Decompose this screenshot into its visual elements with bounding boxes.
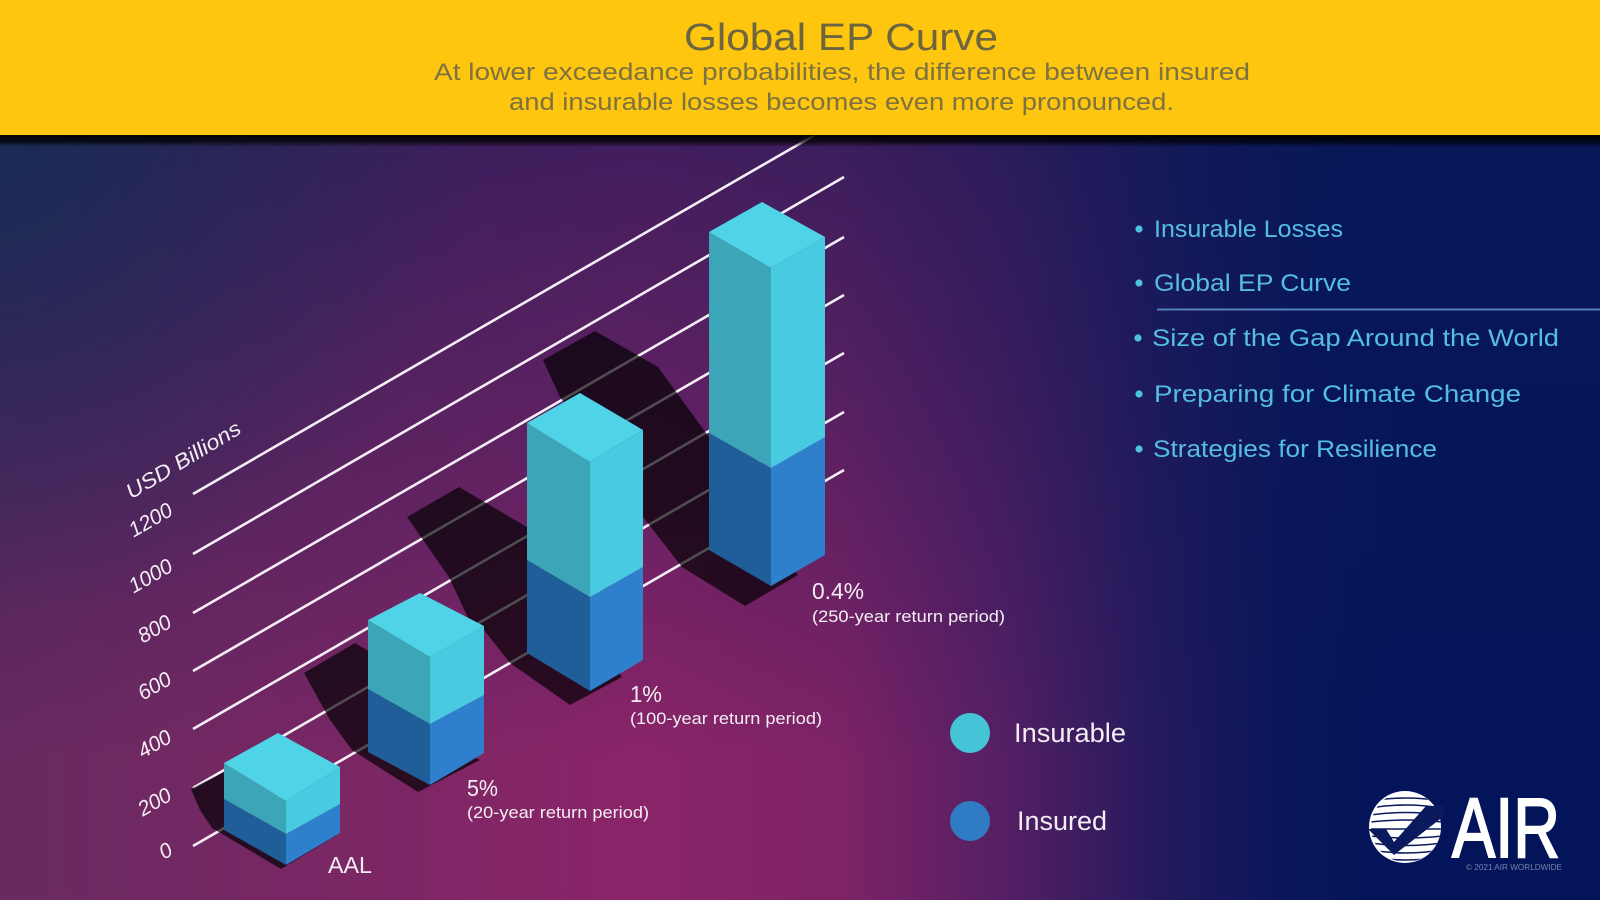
header shadow xyxy=(0,135,1600,147)
title: Global EP Curve xyxy=(684,17,998,59)
section list: Global EP Curve xyxy=(1154,270,1351,297)
y-axis labels: 1000 xyxy=(125,555,177,598)
section list: Size of the Gap Around the World xyxy=(1152,325,1559,352)
category labels xyxy=(328,578,1005,878)
EP curve chart xyxy=(122,132,1005,878)
y-axis labels xyxy=(122,417,246,864)
wordmark: AIR xyxy=(1452,781,1560,875)
y-axis labels: 600 xyxy=(134,667,176,705)
bar: 5% xyxy=(368,593,484,785)
category labels: 0.4% xyxy=(812,578,864,604)
icon: striped globe with check xyxy=(1368,791,1444,863)
header banner xyxy=(0,0,1600,135)
subtitle xyxy=(434,59,1250,116)
bar shadows xyxy=(191,331,798,869)
category labels: (20-year return period) xyxy=(467,803,649,822)
category labels: 5% xyxy=(467,775,498,801)
section list xyxy=(1134,216,1600,463)
gridlines xyxy=(193,132,844,846)
bar: 1% xyxy=(527,393,643,691)
y-axis labels: USD Billions xyxy=(122,417,246,504)
y-axis labels: 200 xyxy=(133,783,176,822)
category labels: (100-year return period) xyxy=(630,709,822,728)
y-axis labels: 1200 xyxy=(125,499,177,542)
legend xyxy=(950,713,1126,841)
legend: Insurable xyxy=(1014,718,1126,748)
legend: Insured xyxy=(1017,806,1107,836)
y-axis labels: 400 xyxy=(134,725,176,763)
bar: AAL xyxy=(224,733,340,865)
section list: Insurable Losses xyxy=(1154,216,1343,243)
subtitle: and insurable losses becomes even more pronounced. xyxy=(509,89,1174,116)
category labels: (250-year return period) xyxy=(812,607,1005,626)
copyright: © 2021 AIR WORLDWIDE xyxy=(1466,863,1562,872)
subtitle: At lower exceedance probabilities, the difference between insured xyxy=(434,59,1250,86)
category labels: 1% xyxy=(630,681,662,707)
category labels: AAL xyxy=(328,852,372,878)
AIR logo xyxy=(1369,791,1562,870)
bar: 0.4% xyxy=(709,202,825,586)
y-axis labels: 0 xyxy=(155,838,177,864)
section list: Preparing for Climate Change xyxy=(1154,381,1521,408)
section list: Strategies for Resilience xyxy=(1153,436,1437,463)
y-axis labels: 800 xyxy=(134,610,176,648)
